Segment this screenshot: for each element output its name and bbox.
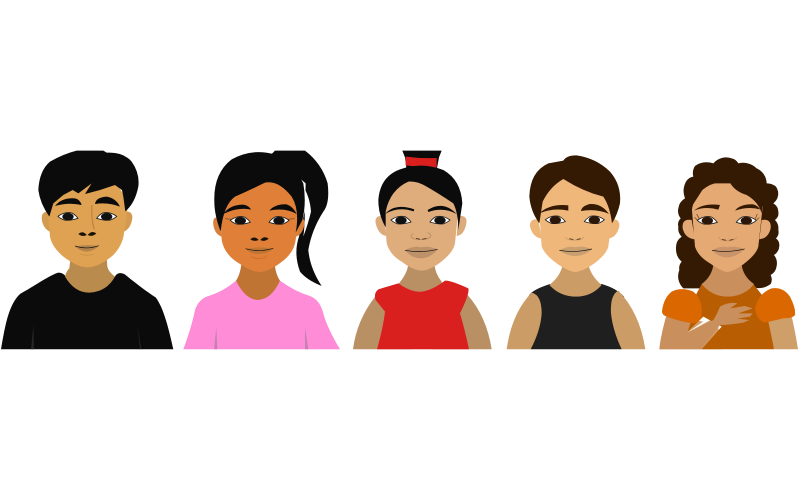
curly hair bbox=[676, 157, 779, 288]
arms bbox=[353, 295, 492, 349]
lips bbox=[405, 247, 438, 258]
hair bbox=[38, 151, 139, 217]
ears bbox=[375, 216, 466, 236]
eyebrows bbox=[385, 206, 457, 214]
face bbox=[384, 177, 458, 271]
eyebrows bbox=[694, 204, 760, 211]
nostrils bbox=[78, 232, 96, 236]
left eye bbox=[391, 216, 411, 224]
ears bbox=[42, 212, 132, 232]
nose bbox=[566, 237, 584, 240]
hair fringe bbox=[690, 170, 765, 213]
person 1: boy in black shirt bbox=[1, 151, 173, 349]
lips bbox=[559, 247, 592, 256]
pink shirt bbox=[183, 281, 340, 349]
person 3: woman with red top and hair bun bbox=[353, 151, 492, 349]
hair bbox=[378, 166, 462, 230]
dress bbox=[687, 284, 774, 349]
sleeve folds bbox=[31, 325, 141, 349]
right eye bbox=[584, 216, 604, 224]
red top bbox=[375, 281, 469, 349]
person 2: girl with ponytail in pink shirt bbox=[183, 151, 340, 349]
sleeve folds bbox=[214, 327, 308, 349]
left eye bbox=[697, 217, 717, 224]
shirt bbox=[1, 273, 173, 349]
right eye bbox=[736, 217, 756, 224]
neck bbox=[398, 263, 445, 297]
face bbox=[692, 183, 763, 272]
lips bbox=[712, 247, 745, 257]
ears bbox=[213, 217, 305, 237]
nose bbox=[719, 237, 737, 241]
ears bbox=[683, 220, 771, 239]
eyebrows bbox=[223, 204, 297, 214]
lips bbox=[75, 245, 99, 252]
nose bbox=[92, 205, 94, 229]
face bbox=[47, 177, 128, 267]
lash lines bbox=[225, 218, 294, 220]
nostrils bbox=[250, 237, 269, 241]
face bbox=[539, 173, 613, 272]
arms bbox=[659, 317, 798, 349]
black top bbox=[528, 284, 624, 349]
left eye bbox=[58, 213, 78, 220]
hair bun bbox=[402, 151, 442, 170]
person 5: woman with curly hair and orange dress bbox=[659, 157, 798, 349]
eyebrows bbox=[539, 204, 609, 214]
right puff sleeve bbox=[755, 288, 795, 323]
right eye bbox=[430, 216, 450, 224]
eyelashes bbox=[695, 214, 759, 220]
ponytail gap bbox=[302, 185, 311, 237]
hair bbox=[529, 155, 620, 223]
nostrils bbox=[569, 237, 581, 241]
nose bbox=[411, 233, 431, 239]
neck bbox=[702, 265, 754, 297]
lips bbox=[246, 247, 273, 254]
hair band bbox=[406, 157, 437, 168]
eyebrows bbox=[55, 197, 120, 207]
nostrils bbox=[416, 237, 426, 241]
arms bbox=[507, 291, 645, 349]
person 4: woman with short brown hair in black top bbox=[507, 155, 645, 349]
neck bbox=[65, 257, 115, 293]
neck bbox=[236, 260, 280, 300]
left arm with hand bbox=[659, 303, 753, 349]
chin shadow bbox=[252, 257, 267, 259]
right eye bbox=[97, 213, 117, 220]
ponytail bbox=[272, 151, 328, 286]
left eye bbox=[230, 217, 250, 224]
hair bbox=[214, 152, 305, 233]
nostrils bbox=[722, 238, 733, 242]
ears bbox=[530, 219, 619, 239]
left eye bbox=[545, 216, 565, 224]
face bbox=[220, 177, 299, 272]
neck bbox=[549, 263, 602, 297]
chin shadow bbox=[80, 254, 94, 255]
right eye bbox=[269, 217, 289, 224]
left puff sleeve bbox=[662, 289, 702, 323]
